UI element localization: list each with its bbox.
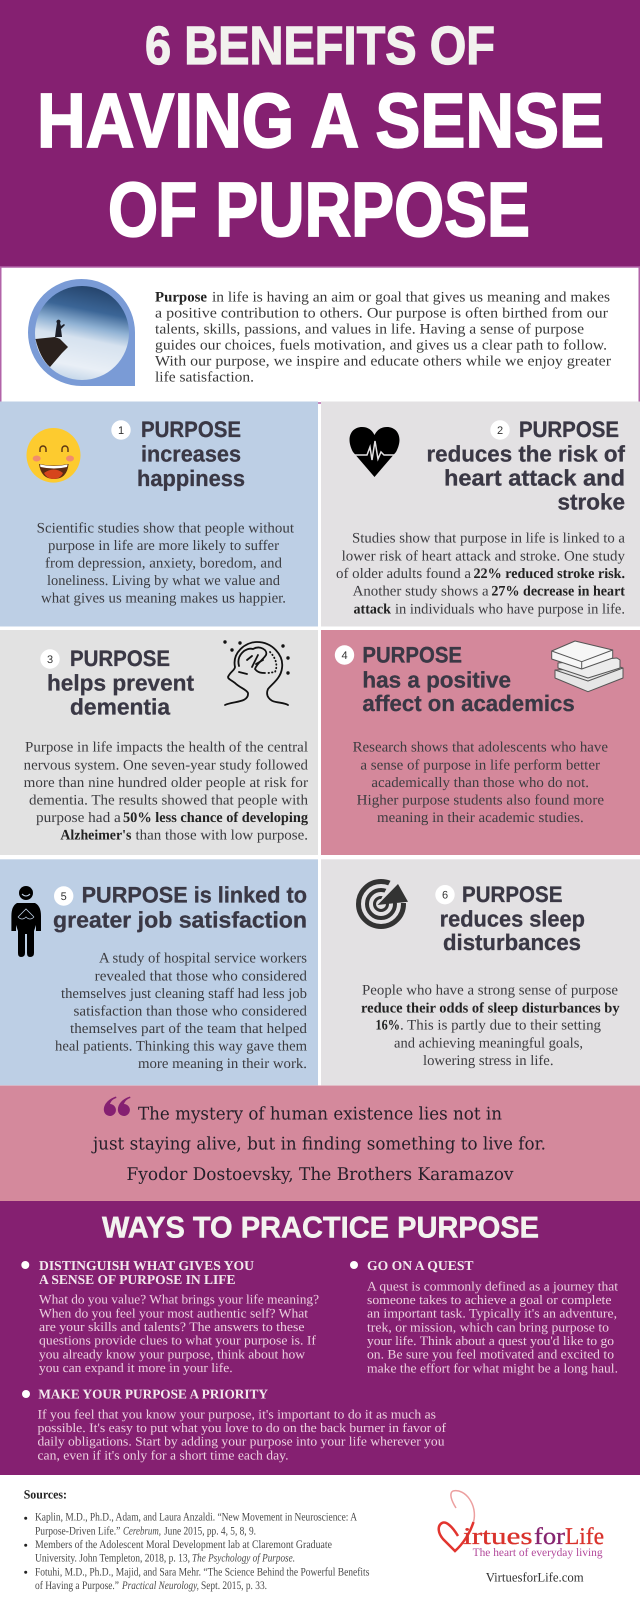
- quote text: The mystery of human existence lies not in: [138, 1104, 502, 1124]
- tip: distinguish what gives you purpose: questions provide clues to what your purpose is. If: [39, 1333, 317, 1348]
- number badge 6: [435, 885, 455, 904]
- icon: stack of books: [552, 641, 623, 692]
- heading: reduces sleep: [440, 907, 585, 932]
- body text: Higher purpose students also found more: [357, 792, 604, 808]
- heading: affect on academics: [362, 691, 575, 716]
- sources list: Fotuhi, M.D., Ph.D., Majid, and Sara Mehr. “The Science Behind the Powerful Benefits: [35, 1566, 370, 1578]
- body text: purpose had a: [36, 810, 121, 826]
- tip: make your purpose a priority: daily obligations. Start by adding your purpose into your life wherever you: [38, 1434, 445, 1449]
- heading: [440, 882, 585, 955]
- body text: than those with low purpose.: [136, 828, 308, 844]
- logo: Virtues for Life: The heart of everyday living: [473, 1547, 603, 1559]
- icon: person with hands together: [11, 886, 41, 957]
- quote text: [91, 1104, 546, 1185]
- heading: PURPOSE: [70, 646, 170, 671]
- title banner: 6 BENEFITS OF: [145, 16, 495, 76]
- body text: nervous system. One seven-year study followed: [24, 757, 309, 773]
- body text: more than nine hundred older people at risk for: [24, 775, 308, 791]
- tip: go on a quest: your life. Think about a quest you'd like to go: [367, 1333, 614, 1348]
- icon: smiling face: [26, 428, 80, 483]
- body text: reduce their odds of sleep disturbances by: [361, 1000, 620, 1016]
- body text: [353, 740, 608, 826]
- panel: introduction: [1, 267, 639, 403]
- section heading: WAYS TO PRACTICE PURPOSE: [102, 1211, 539, 1244]
- sources list: Purpose-Driven Life.”: [35, 1525, 120, 1537]
- number badge 1: [111, 420, 131, 440]
- heading: has a positive: [362, 667, 511, 692]
- text: definition of purpose: a positive contribution to others. Our purpose is often birthed from our: [155, 306, 608, 322]
- body text: . This is partly due to their setting: [400, 1018, 601, 1034]
- heading: [47, 646, 195, 719]
- tip: make your purpose a priority: MAKE YOUR PURPOSE A PRIORITY: [38, 1387, 268, 1402]
- body text: [55, 951, 308, 1072]
- text: definition of purpose: Purpose: [155, 290, 208, 306]
- body text: 50% less chance of developing: [123, 810, 309, 826]
- heading: helps prevent: [47, 671, 195, 696]
- logo: Virtues for Life: VirtuesforLife.com: [486, 1570, 584, 1585]
- heading: disturbances: [443, 930, 581, 955]
- tip: distinguish what gives you purpose: A SENSE OF PURPOSE IN LIFE: [39, 1272, 235, 1287]
- body text: dementia. The results showed that people with: [29, 792, 309, 808]
- heading: [362, 642, 575, 716]
- sources list: Practical Neurology,: [121, 1580, 199, 1592]
- sources list: Members of the Adolescent Moral Development lab at Claremont Graduate: [35, 1539, 332, 1551]
- body text: revealed that those who considered: [95, 968, 308, 984]
- body text: attack: [354, 601, 392, 617]
- sources list: June 2015, pp. 4, 5, 8, 9.: [164, 1525, 256, 1537]
- heading: stroke: [558, 490, 625, 515]
- text: definition of purpose: [155, 290, 611, 386]
- number badge 2: 2: [497, 425, 503, 437]
- number badge 3: [40, 649, 60, 669]
- body text: themselves just cleaning staff had less job: [61, 986, 307, 1002]
- logo: Virtues for Life: [439, 1491, 604, 1585]
- body text: Another study shows a: [353, 584, 489, 600]
- tip: distinguish what gives you purpose: When do you feel your most authentic self? What: [39, 1305, 308, 1320]
- number badge 4: [335, 645, 354, 665]
- tip: go on a quest: [350, 1258, 618, 1375]
- heading: dementia: [70, 694, 170, 719]
- body text: 16%: [376, 1018, 400, 1034]
- heading: happiness: [137, 466, 245, 491]
- text: definition of purpose: life satisfaction.: [155, 370, 254, 386]
- tip: make your purpose a priority: can, even if it's only for a short time each day.: [38, 1447, 288, 1462]
- icon: head with brain: [224, 641, 289, 705]
- tip: distinguish what gives you purpose: What do you value? What brings your life meaning?: [39, 1292, 319, 1307]
- body text: from depression, anxiety, boredom, and: [45, 556, 283, 572]
- tip: go on a quest: someone takes to achieve a goal or complete: [367, 1292, 612, 1307]
- sources list: Cerebrum,: [123, 1525, 161, 1537]
- title banner: OF PURPOSE: [108, 167, 530, 253]
- logo: Virtues for Life: for: [534, 1524, 565, 1550]
- body text: a sense of purpose in life perform better: [360, 757, 600, 773]
- body text: People who have a strong sense of purpose: [362, 983, 618, 999]
- panel: benefit 6 sleep: [321, 859, 640, 1085]
- tip: go on a quest: an important task. Typically it's an adventure,: [367, 1306, 617, 1321]
- icon: teardrop photo of person on a cliff: [28, 279, 135, 386]
- heading: [137, 417, 245, 491]
- tip: make your purpose a priority: possible. It's easy to put what you love to do on the back burner in favor of: [38, 1420, 447, 1435]
- tip: distinguish what gives you purpose: you can expand it more in your life.: [39, 1360, 233, 1375]
- heading: PURPOSE: [362, 642, 462, 667]
- number badge 5: [54, 886, 73, 906]
- quote text: Fyodor Dostoevsky, The Brothers Karamazov: [126, 1165, 514, 1185]
- number badge 4: 4: [341, 650, 348, 662]
- body text: [24, 740, 309, 844]
- body text: academically than those who do not.: [371, 775, 589, 791]
- body text: Research shows that adolescents who have: [353, 740, 608, 756]
- sources list: Sept. 2015, p. 33.: [201, 1580, 267, 1592]
- tip: go on a quest: trek, or mission, which can bring purpose to: [367, 1319, 609, 1334]
- panel: benefit 2 heart: [321, 402, 640, 626]
- number badge 3: 3: [47, 654, 53, 666]
- tip: make your purpose a priority: If you feel that you know your purpose, it's important to do it as much as: [38, 1406, 436, 1421]
- heading: [53, 883, 307, 932]
- logo: Virtues for Life: irtues: [463, 1524, 533, 1550]
- panel: ways to practice purpose: [0, 1201, 640, 1475]
- tip: distinguish what gives you purpose: are your skills and talents? The answers to these: [39, 1319, 305, 1334]
- text: definition of purpose: talents, skills, passions, and values in life. Having a sense of purpose: [155, 322, 584, 338]
- text: definition of purpose: guides our choices, fuels motivation, and gives us a clear path to follow.: [155, 338, 607, 354]
- heading: PURPOSE is linked to: [82, 883, 307, 908]
- panel: benefit 1 happiness: [0, 402, 318, 626]
- body text: A study of hospital service workers: [99, 951, 307, 967]
- heading: PURPOSE: [519, 417, 619, 442]
- sources list: [24, 1487, 370, 1592]
- heading: PURPOSE: [462, 882, 562, 907]
- heading: increases: [141, 442, 241, 467]
- panel: benefit 3 dementia: [0, 630, 318, 855]
- tip: distinguish what gives you purpose: DISTINGUISH WHAT GIVES YOU: [39, 1258, 254, 1273]
- body text: 22% reduced stroke risk.: [474, 566, 625, 582]
- body text: and achieving meaningful goals,: [394, 1035, 583, 1051]
- panel: benefit 4 academics: [321, 630, 640, 855]
- icon: target with arrow: [358, 878, 412, 926]
- body text: loneliness. Living by what we value and: [47, 573, 281, 589]
- body text: themselves part of the team that helped: [70, 1021, 308, 1037]
- tip: go on a quest: GO ON A QUEST: [367, 1258, 474, 1273]
- body text: purpose in life are more likely to suffer: [48, 538, 279, 554]
- number badge 6: 6: [442, 890, 448, 902]
- text: definition of purpose: With our purpose, we inspire and educate others while we enjoy greater: [155, 354, 611, 370]
- body text: [361, 983, 620, 1069]
- body text: 27% decrease in heart: [491, 584, 625, 600]
- body text: Purpose in life impacts the health of the central: [25, 740, 308, 756]
- number badge 2: [490, 420, 510, 440]
- sources list: of Having a Purpose.”: [35, 1580, 119, 1592]
- quote text: just staying alive, but in finding something to live for.: [91, 1134, 546, 1154]
- tip: distinguish what gives you purpose: you already know your purpose, think about how: [39, 1346, 306, 1361]
- body text: more meaning in their work.: [138, 1056, 307, 1072]
- body text: Scientific studies show that people without: [37, 520, 294, 536]
- heading: heart attack and: [444, 466, 625, 491]
- logo: Virtues for Life: Life: [565, 1524, 604, 1550]
- icon: quotation mark: [104, 1096, 130, 1116]
- body text: [336, 531, 626, 617]
- body text: Studies show that purpose in life is linked to a: [352, 531, 626, 547]
- sources list: Kaplin, M.D., Ph.D., Adam, and Laura Anzaldi. “New Movement in Neuroscience: A: [35, 1512, 358, 1524]
- title banner: [0, 0, 640, 267]
- number badge 5: 5: [61, 891, 67, 903]
- heading: reduces the risk of: [426, 442, 625, 467]
- body text: satisfaction than those who considered: [74, 1003, 308, 1019]
- panel: quote: [0, 1086, 640, 1202]
- sources list: Sources:: [24, 1487, 67, 1501]
- tip: go on a quest: make the effort for what might be a long haul.: [367, 1360, 618, 1375]
- body text: Alzheimer's: [60, 828, 132, 844]
- body text: heal patients. Thinking this way gave them: [55, 1039, 308, 1055]
- heading: greater job satisfaction: [53, 907, 307, 932]
- tip: go on a quest: A quest is commonly defined as a journey that: [367, 1278, 618, 1293]
- tip: go on a quest: on. Be sure you feel motivated and excited to: [367, 1347, 614, 1362]
- tip: make your purpose a priority: [22, 1387, 447, 1462]
- heading: [426, 417, 625, 515]
- heading: PURPOSE: [141, 417, 241, 442]
- panel: benefit 5 job satisfaction: [0, 859, 318, 1085]
- body text: meaning in their academic studies.: [377, 810, 584, 826]
- sources list: The Psychology of Purpose.: [192, 1553, 295, 1565]
- sources list: University. John Templeton, 2018, p. 13,: [35, 1553, 190, 1565]
- body text: lowering stress in life.: [423, 1053, 554, 1069]
- body text: what gives us meaning makes us happier.: [41, 591, 286, 607]
- body text: of older adults found a: [336, 566, 472, 582]
- icon: heart with pulse line: [350, 427, 399, 477]
- body text: in individuals who have purpose in life.: [395, 601, 625, 617]
- number badge 1: 1: [118, 425, 124, 437]
- tip: distinguish what gives you purpose: [21, 1258, 319, 1375]
- body text: lower risk of heart attack and stroke. One study: [342, 548, 626, 564]
- text: definition of purpose: in life is having an aim or goal that gives us meaning and makes: [212, 290, 610, 306]
- body text: [37, 520, 294, 607]
